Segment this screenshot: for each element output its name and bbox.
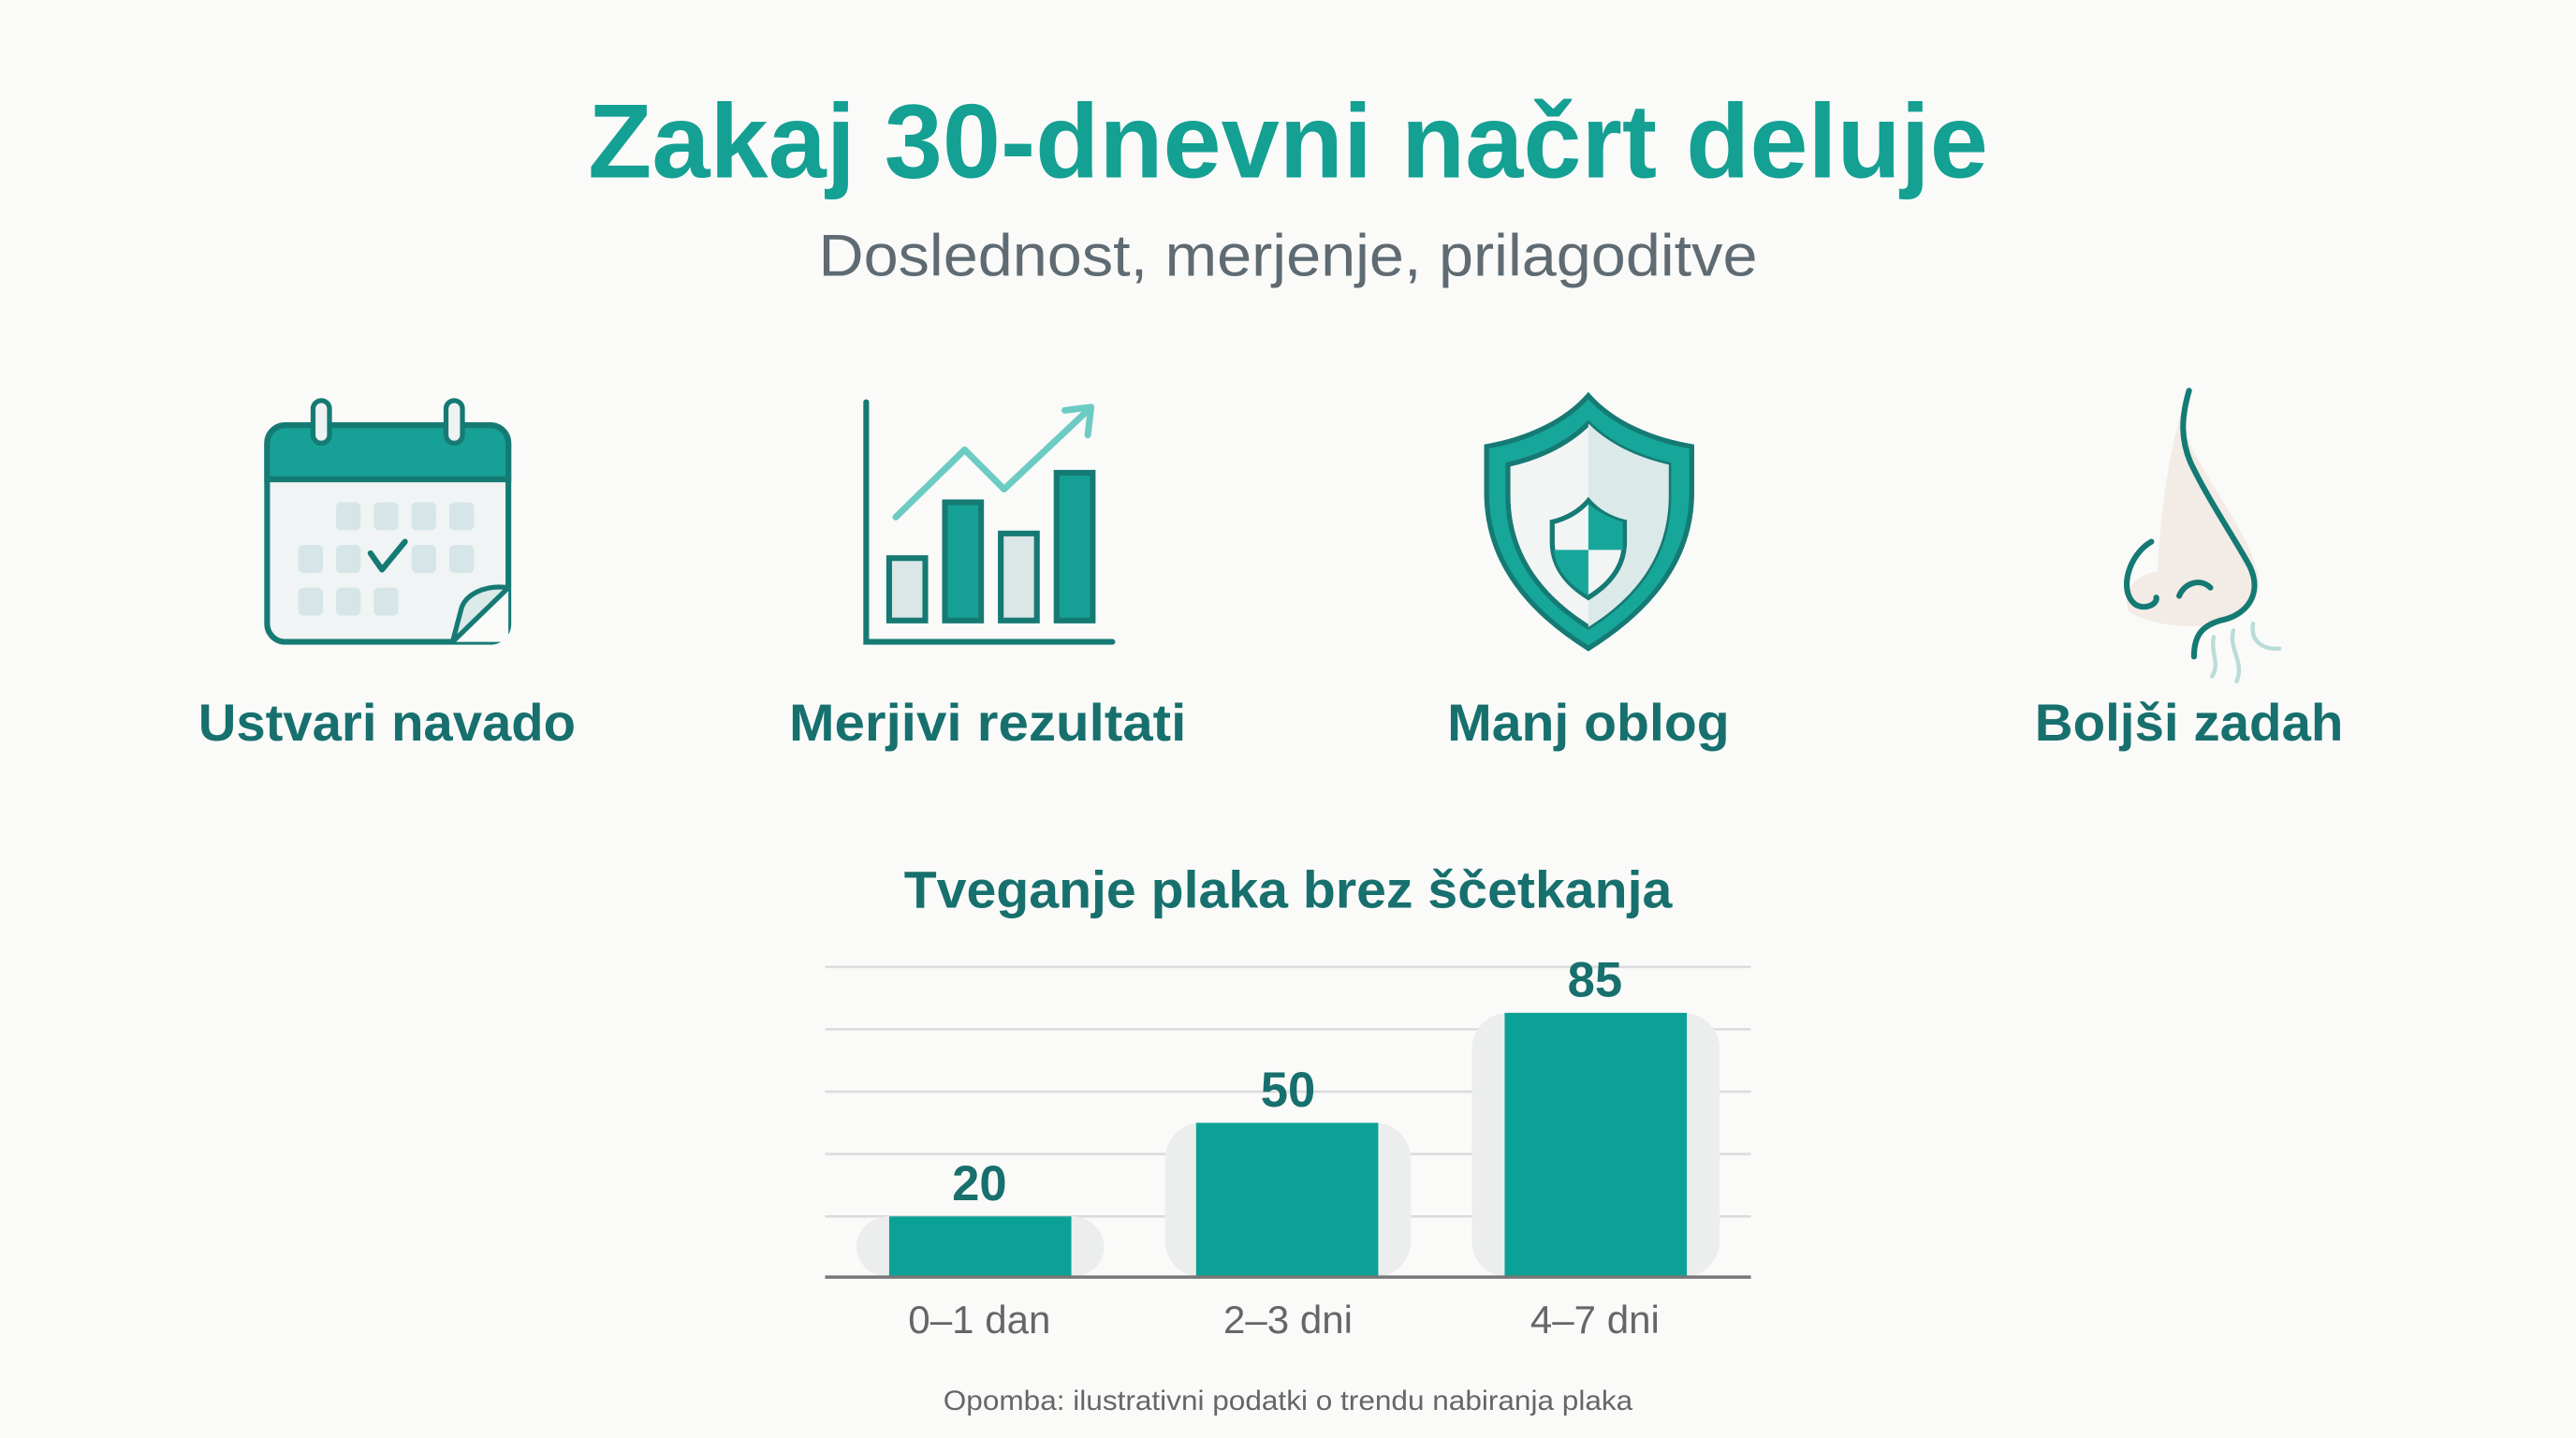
bar: 0-1 dan [889, 1216, 1072, 1277]
label: Manj oblog: Manj oblog [1447, 693, 1730, 752]
subtitle: Doslednost, merjenje, prilagoditve [819, 224, 1757, 289]
bar chart: 4–7 dni [1530, 1298, 1660, 1342]
icon: bar chart [866, 403, 1112, 642]
bar chart: 0–1 dan [908, 1298, 1050, 1342]
chart title: Tveganje plaka brez ščetkanja [904, 860, 1673, 919]
bar chart [826, 952, 1750, 1342]
bar chart: 85 [1568, 952, 1622, 1007]
bar: 2-3 dni [1196, 1123, 1378, 1277]
icon: nose [2127, 390, 2279, 682]
bar chart: 20 [952, 1156, 1007, 1211]
label: Boljši zadah: Boljši zadah [2035, 693, 2343, 752]
footnote: Opomba: ilustrativni podatki o trendu nabiranja plaka [944, 1386, 1633, 1416]
label: Ustvari navado: Ustvari navado [198, 693, 576, 752]
icon: shield [1486, 396, 1691, 649]
bar chart: 50 [1261, 1063, 1315, 1118]
bar: 4-7 dni [1504, 1013, 1687, 1277]
label: Merjivi rezultati: Merjivi rezultati [789, 693, 1186, 752]
icon: calendar [267, 401, 508, 642]
title: Zakaj 30-dnevni načrt deluje [588, 81, 1988, 199]
bar chart: 2–3 dni [1223, 1298, 1353, 1342]
